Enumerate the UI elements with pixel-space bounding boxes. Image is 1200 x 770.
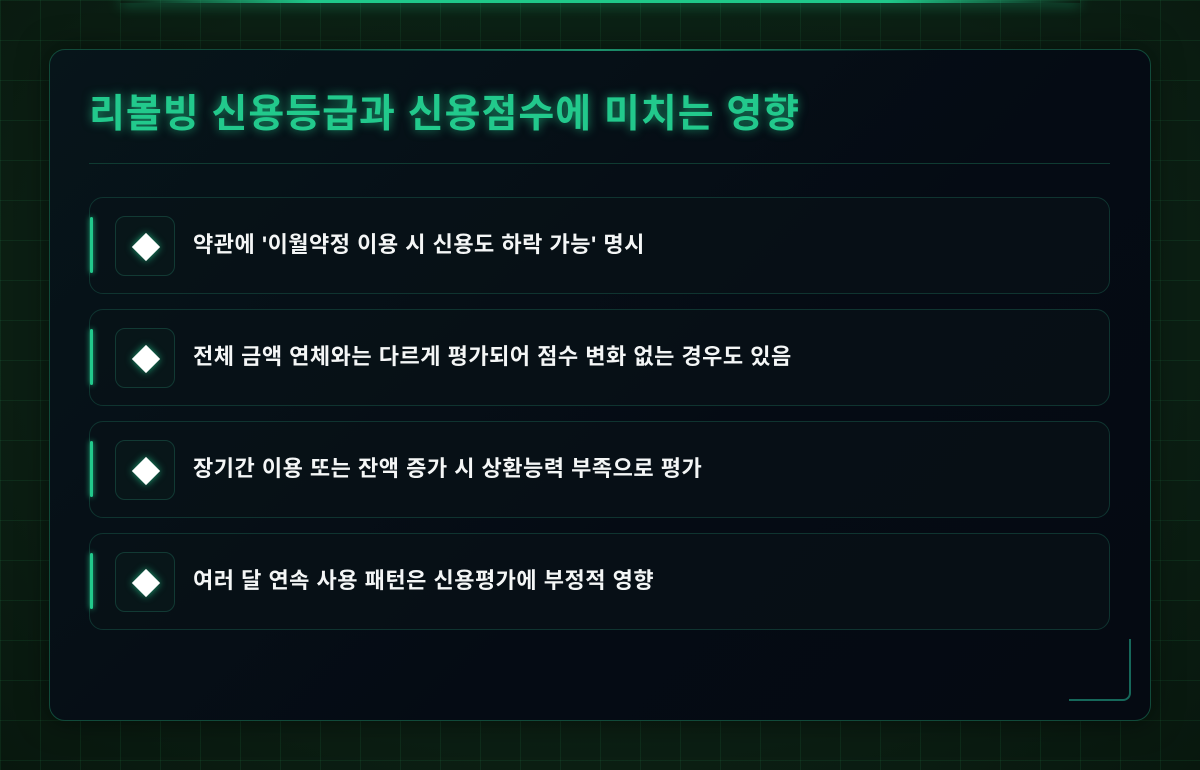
- item 2: [89, 309, 1110, 406]
- text 1: 약관에 '이월약정 이용 시 신용도 하락 가능' 명시: [193, 232, 645, 257]
- icon: diamond: [115, 328, 175, 388]
- title: 리볼빙 신용등급과 신용점수에 미치는 영향: [89, 93, 800, 136]
- corner accent: [1069, 639, 1131, 701]
- icon: diamond: [115, 552, 175, 612]
- text 2: 전체 금액 연체와는 다르게 평가되어 점수 변화 없는 경우도 있음: [193, 344, 792, 369]
- icon: diamond: [115, 440, 175, 500]
- item 4: [89, 533, 1110, 630]
- item 3: [89, 421, 1110, 518]
- item 1: [89, 197, 1110, 294]
- text 4: 여러 달 연속 사용 패턴은 신용평가에 부정적 영향: [193, 568, 654, 593]
- text 3: 장기간 이용 또는 잔액 증가 시 상환능력 부족으로 평가: [193, 456, 702, 481]
- icon: diamond: [115, 216, 175, 276]
